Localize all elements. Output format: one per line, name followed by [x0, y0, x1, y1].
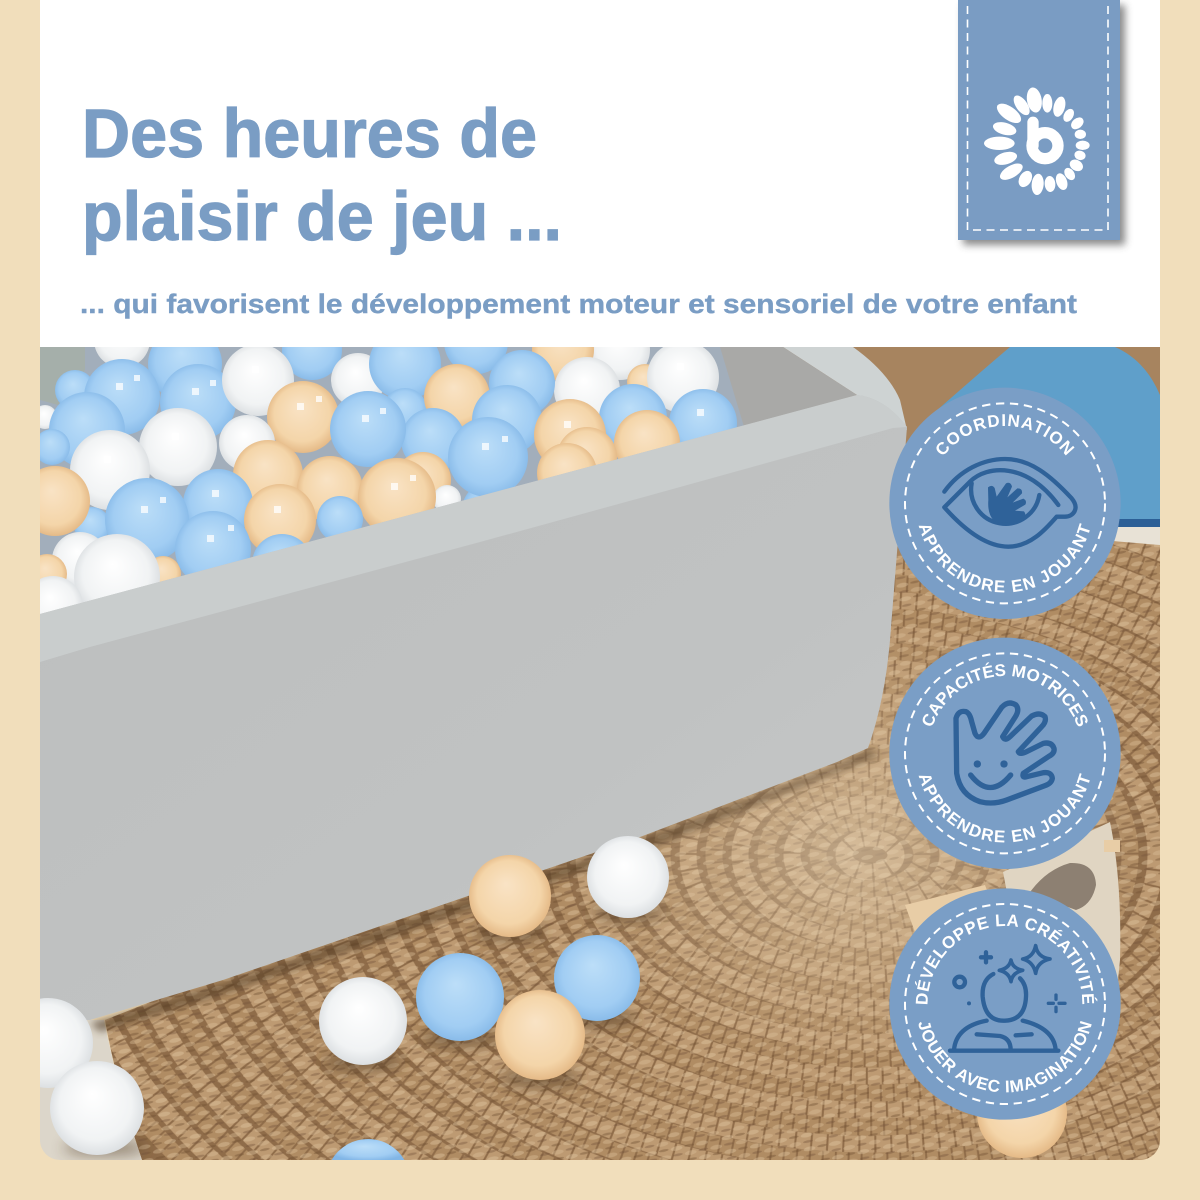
box front face	[40, 395, 907, 1020]
balls interior	[40, 347, 744, 576]
balls in the pit	[40, 347, 737, 614]
blue felt play mat	[935, 347, 1160, 522]
jute rug	[105, 540, 1160, 1160]
wooden floor	[783, 347, 1160, 556]
box contact shadow	[90, 750, 880, 1032]
icon: meditating child with stars	[950, 946, 1065, 1051]
brand label	[958, 0, 1125, 245]
badge text: jouer avec imagination: JOUER AVEC IMAGINATION	[918, 1021, 1092, 1092]
title: plaisir de jeu ...	[82, 178, 562, 255]
icon: smiling hand	[956, 703, 1054, 803]
badge: coordination	[889, 388, 1120, 619]
badge: capacites motrices	[889, 638, 1121, 869]
wooden walrus toy	[905, 822, 1120, 980]
photo: ball pit on jute rug	[3, 310, 1160, 1160]
badge text: apprendre en jouant: APPRENDRE EN JOUANT	[918, 773, 1090, 842]
ball reflections	[104, 363, 704, 542]
badge text: coordination: COORDINATION	[936, 414, 1074, 456]
rug fringe	[40, 1020, 142, 1160]
icon: eye with hand	[944, 459, 1075, 547]
badge text: apprendre en jouant: APPRENDRE EN JOUANT	[918, 523, 1090, 592]
box inner corner wall	[40, 347, 85, 405]
box top rim	[40, 395, 907, 662]
badge: creativite	[889, 888, 1121, 1120]
logo: flower b	[984, 86, 1090, 195]
felt underside	[1118, 519, 1160, 527]
title	[82, 95, 562, 255]
box back wall	[713, 347, 857, 427]
badge text: capacites motrices: CAPACITÉS MOTRICES	[922, 662, 1088, 726]
subtitle: ... qui favorisent le développement moteur et sensoriel de votre enfant	[80, 289, 1077, 319]
fringe behind felt	[1114, 527, 1160, 545]
box corner rim	[783, 347, 907, 430]
badge text: developpe la creativite: DÉVELOPPE LA CRÉATIVITÉ	[914, 914, 1098, 1004]
title: Des heures de	[82, 95, 537, 172]
white header panel	[40, 0, 1160, 347]
loose balls on the rug	[3, 836, 1067, 1160]
loose ball shadows	[63, 903, 664, 1155]
